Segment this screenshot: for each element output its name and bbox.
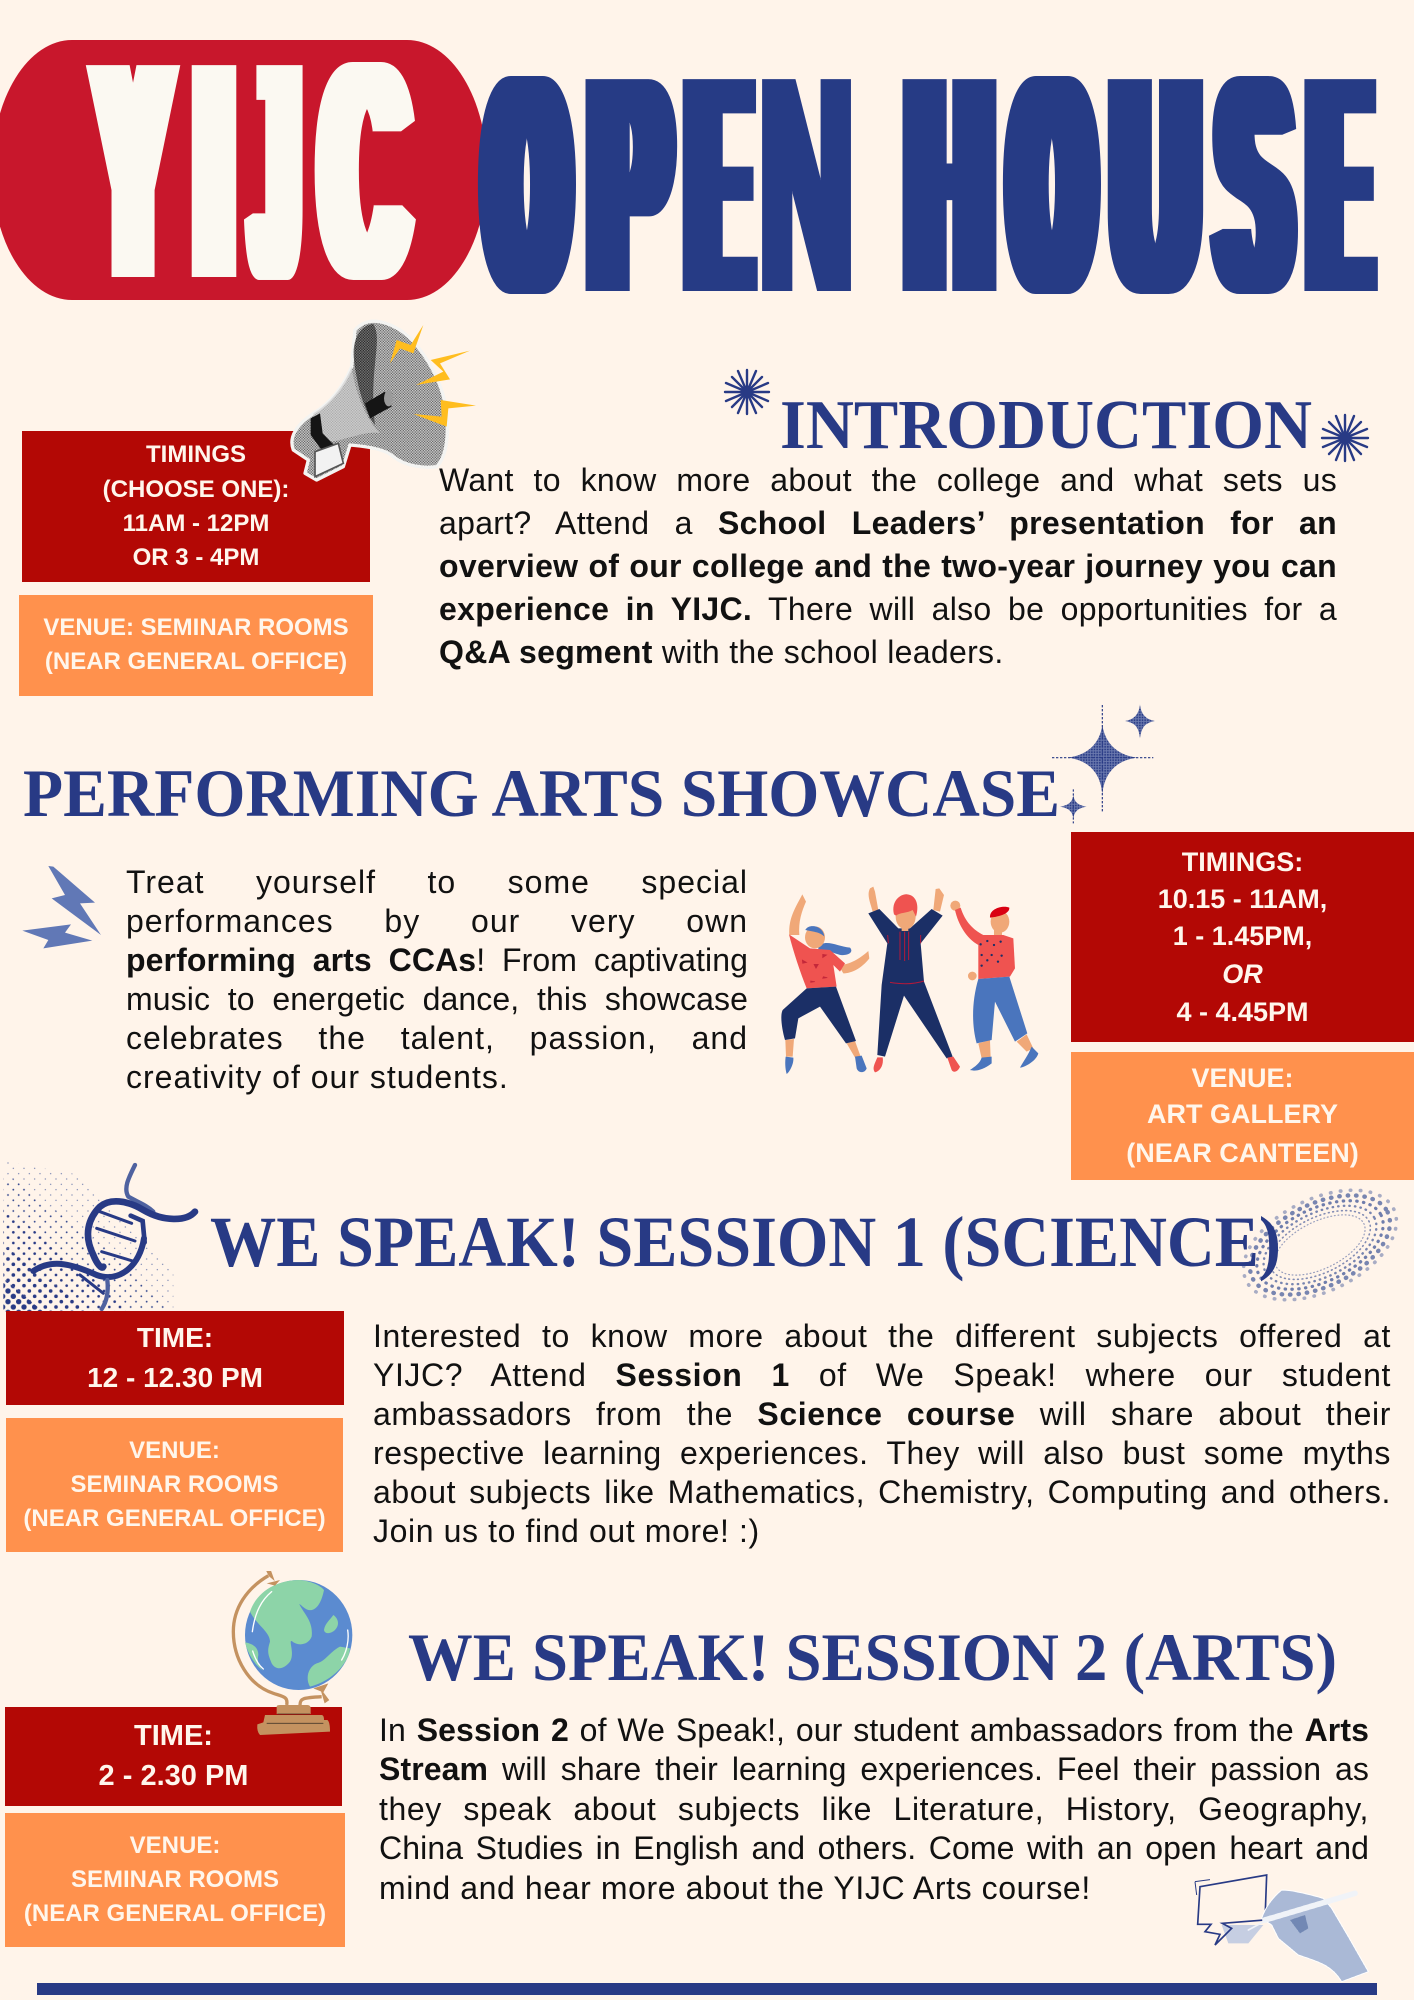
box: session 2 time: 2 - 2.30 PM [99,1760,248,1792]
box: session 2 venue: SEMINAR ROOMS [71,1866,279,1893]
text: session 2: China Studies in English and others. Come with an open heart and [379,1830,1369,1866]
text: performing arts: creativity of our students. [126,1059,509,1095]
text: session 2: they speak about subjects like Literature, History, Geography, [379,1791,1369,1827]
icon: asterisk star right [1322,415,1368,461]
heading: introduction: INTRODUCTION [780,387,1312,464]
box: introduction timings: OR 3 - 4PM [133,544,259,571]
icon: sparkle stars [1052,704,1155,823]
box: session 2 venue: VENUE: [130,1832,220,1859]
bottom bar [37,1983,1377,1995]
title: OPEN HOUSE: U [1115,13,1196,357]
title badge: YIJC [0,0,487,343]
illustration: three dancers [781,887,1038,1074]
text: introduction: overview of our college and the two-year journey you can [439,548,1337,584]
heading: we speak session 2: WE SPEAK! SESSION 2 (ARTS) [408,1619,1337,1695]
box: session 1 venue: VENUE: [129,1437,220,1464]
text: session 1: ambassadors from the Science course will share about their [373,1396,1391,1432]
box: session 1 time [6,1311,344,1405]
text: session 1 [373,1318,1391,1549]
box: session 2 time: TIME: [134,1720,213,1752]
text: session 2: Stream will share their learning experiences. Feel their passion as [379,1751,1369,1787]
icon: hand writing speech bubble [1194,1874,1369,1982]
box: performing arts venue: (NEAR CANTEEN) [1126,1138,1359,1168]
box: session 2 venue [5,1813,345,1947]
box: session 2 time [5,1707,342,1806]
box: performing arts venue [1071,1052,1414,1180]
text: introduction: apart? Attend a School Leaders’ presentation for an [439,505,1337,541]
title badge: YIJC: I [198,0,230,343]
text: performing arts: celebrates the talent, passion, and [126,1020,748,1056]
box: session 1 time: 12 - 12.30 PM [87,1362,263,1393]
box: session 1 venue [6,1418,343,1552]
text: introduction: Q&A segment with the school leaders. [439,634,1004,670]
box: performing arts timings: 4 - 4.45PM [1176,997,1309,1027]
heading: performing arts showcase: PERFORMING ARTS SHOWCASE [23,755,1060,831]
title: OPEN HOUSE: N [762,13,851,357]
box: introduction venue: VENUE: SEMINAR ROOMS [43,614,349,641]
box: session 1 venue: SEMINAR ROOMS [70,1471,278,1498]
icon: blue lightning bolts [22,866,101,948]
text: introduction [439,462,1337,670]
box: introduction timings: TIMINGS [146,441,246,468]
box: session 2 venue: (NEAR GENERAL OFFICE) [24,1900,326,1927]
icon: megaphone [290,320,476,482]
box: introduction timings: (CHOOSE ONE): [103,476,289,503]
box: performing arts venue: ART GALLERY [1147,1099,1338,1129]
title: OPEN HOUSE [490,13,1367,357]
title: OPEN HOUSE: H [909,13,990,357]
box: session 1 time: TIME: [137,1322,213,1353]
text: introduction: Want to know more about the college and what sets us [439,462,1337,498]
box: performing arts timings: 10.15 - 11AM, [1158,884,1327,914]
text: session 1: about subjects like Mathematics, Chemistry, Computing and others. [373,1474,1391,1510]
box: introduction venue [19,595,373,696]
title: OPEN HOUSE: O [490,13,564,357]
box: performing arts timings [1071,832,1414,1042]
text: session 1: respective learning experiences. They will also bust some myths [373,1435,1391,1471]
title badge: YIJC: Y [98,0,168,343]
text: performing arts: music to energetic dance, this showcase [126,981,748,1017]
box: performing arts venue: VENUE: [1191,1063,1294,1093]
icon: globe [232,1571,352,1735]
text: session 1: Join us to find out more! :) [373,1513,760,1549]
text: performing arts: performances by our very own [126,903,748,939]
text: session 1: YIJC? Attend Session 1 of We Speak! where our student [373,1357,1391,1393]
text: session 2: mind and hear more about the YIJC Arts course! [379,1870,1091,1906]
title badge: YIJC: J [257,0,293,343]
box: session 1 venue: (NEAR GENERAL OFFICE) [23,1505,326,1532]
dancer right [950,901,1038,1071]
heading: we speak session 1: WE SPEAK! SESSION 1 (SCIENCE) [210,1202,1281,1282]
text: performing arts: performing arts CCAs! From captivating [126,942,748,978]
box: introduction venue: (NEAR GENERAL OFFICE) [45,648,347,675]
title badge: YIJC: C [324,0,405,343]
text: performing arts [126,864,748,1095]
icon: asterisk star left [725,370,769,414]
text: session 2 [379,1712,1369,1906]
text: introduction: experience in YIJC. There will also be opportunities for a [439,591,1337,627]
dancer left [781,894,869,1074]
box: introduction timings: 11AM - 12PM [123,510,269,537]
text: session 1: Interested to know more about the different subjects offered at [373,1318,1391,1354]
dancer centre [868,887,960,1072]
box: performing arts timings: OR [1222,959,1263,989]
icon: DNA helix with halftone dots [3,1162,195,1312]
title: OPEN HOUSE: E [691,13,747,357]
text: performing arts: Treat yourself to some special [126,864,748,900]
text: session 2: In Session 2 of We Speak!, our student ambassadors from the Arts [379,1712,1369,1748]
icon: dotted ring [1226,1168,1414,1322]
title: OPEN HOUSE: O [1015,13,1089,357]
title: OPEN HOUSE: P [592,13,667,357]
box: performing arts timings: 1 - 1.45PM, [1173,921,1312,951]
box: introduction timings [22,431,370,582]
box: performing arts timings: TIMINGS: [1182,847,1303,877]
